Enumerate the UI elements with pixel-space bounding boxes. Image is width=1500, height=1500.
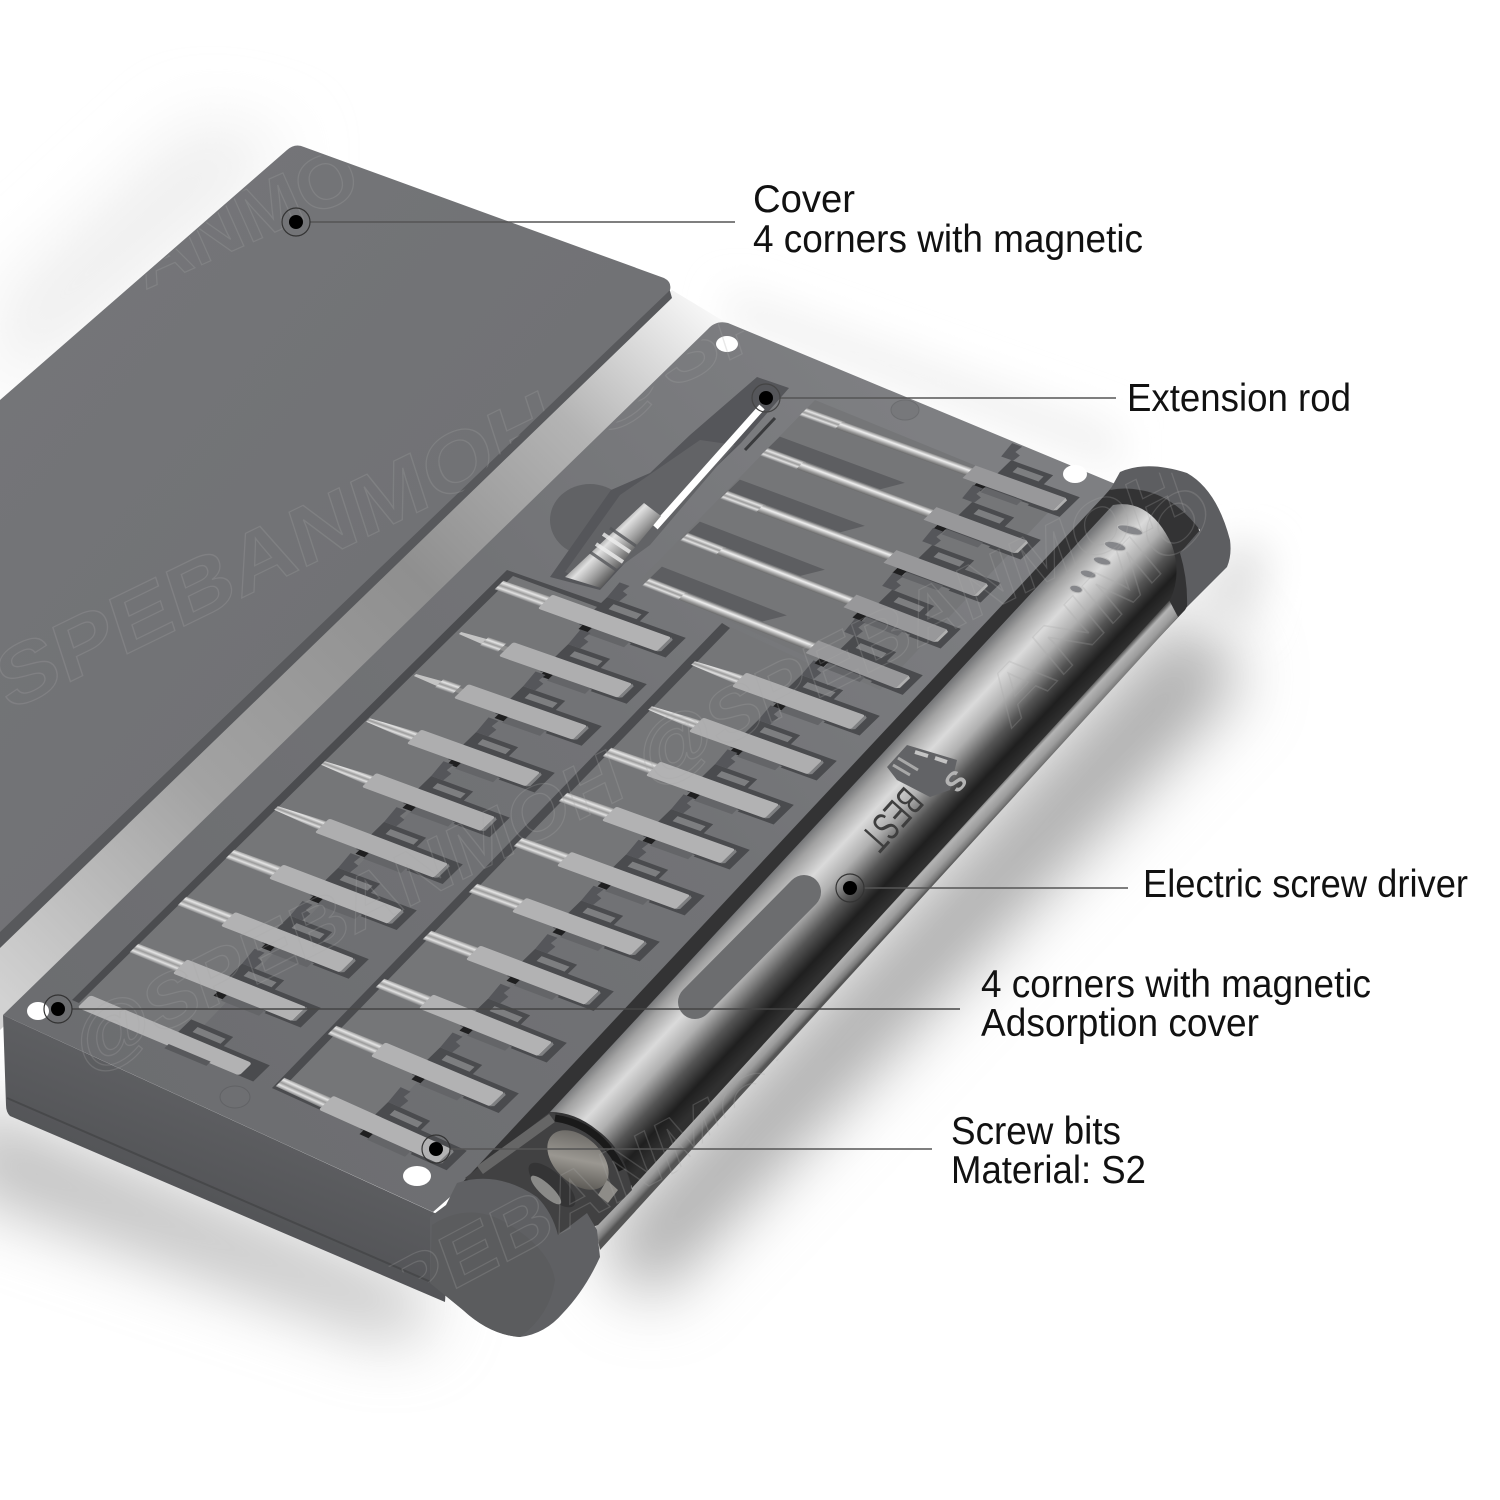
- chuck at driver tip: [465, 1112, 632, 1240]
- right bit well: [272, 623, 812, 1130]
- watermarks: [0, 131, 1228, 1360]
- leader: magnetic corners: [44, 995, 960, 1023]
- bottom end cap: [430, 1179, 600, 1337]
- logo cube: [887, 745, 974, 799]
- slot: [695, 892, 804, 1002]
- panel: electric screw driver body: [550, 504, 1177, 1188]
- label: electric screw driver: Electric screw driver: [1143, 863, 1468, 906]
- label: extension rod: Extension rod: [1127, 377, 1351, 420]
- right column of screw bits: [267, 629, 904, 1174]
- left bit well: [72, 570, 605, 1045]
- finger scoop: [550, 484, 630, 556]
- watermarks: SPEBANMOH: [327, 1019, 850, 1360]
- logo wordmark: BEST: [853, 779, 931, 859]
- label: magnetic adsorption cover: 4 corners with magnetic: [981, 963, 1371, 1006]
- label: screw bits: [951, 1110, 1146, 1192]
- label: screw bits: Screw bits: [951, 1110, 1121, 1153]
- dimple: [891, 400, 919, 420]
- label: cover: 4 corners with magnetic: [753, 218, 1143, 261]
- watermarks: ANMO: [118, 131, 371, 305]
- label: cover: [753, 178, 1143, 261]
- watermarks: ANMO: [969, 465, 1228, 742]
- top bit well floor: [640, 400, 1060, 690]
- indicator lights: [1069, 523, 1144, 594]
- magnet: top right: [1063, 465, 1087, 483]
- leader: screw bits: [422, 1135, 932, 1163]
- label: magnetic adsorption cover: Adsorption cover: [981, 1002, 1259, 1045]
- label: screw bits: Material: S2: [951, 1149, 1146, 1192]
- leader: extension rod: [752, 384, 1116, 412]
- rod recess: [550, 377, 789, 590]
- leader: cover: [282, 208, 735, 236]
- rod shaft: [655, 407, 762, 527]
- extension rod: [550, 377, 789, 590]
- rod handle: [565, 503, 661, 588]
- watermarks: SPEBANMOH @SP: [0, 264, 787, 729]
- label: cover: Cover: [753, 178, 855, 221]
- top end cap: [1110, 466, 1231, 607]
- panel: cover: [0, 146, 672, 948]
- panel: box side wall: [3, 1015, 450, 1302]
- shadows on the background: [0, 120, 1270, 1340]
- magnet: top left: [716, 336, 738, 352]
- logo cube: S: [938, 764, 974, 799]
- panel: box top face: [3, 322, 1125, 1212]
- leader: electric screw driver: [836, 874, 1128, 902]
- dark tube behind driver: [460, 477, 1201, 1250]
- flat blade bit: [74, 982, 279, 1084]
- magnet: bottom left: [27, 1002, 49, 1020]
- driver channel wall: [458, 490, 1130, 1190]
- label: magnetic adsorption cover: [981, 963, 1371, 1045]
- left column of screw bits: [74, 551, 710, 1084]
- long precision bits: [634, 380, 1102, 698]
- outer clear rail: [595, 598, 1178, 1250]
- magnet: bottom right: [403, 1166, 431, 1186]
- gap between cover and box: [0, 290, 725, 1030]
- watermarks: @SPEBANMOH @SPEBANMOH: [63, 445, 1195, 1087]
- dimple: [220, 1086, 250, 1108]
